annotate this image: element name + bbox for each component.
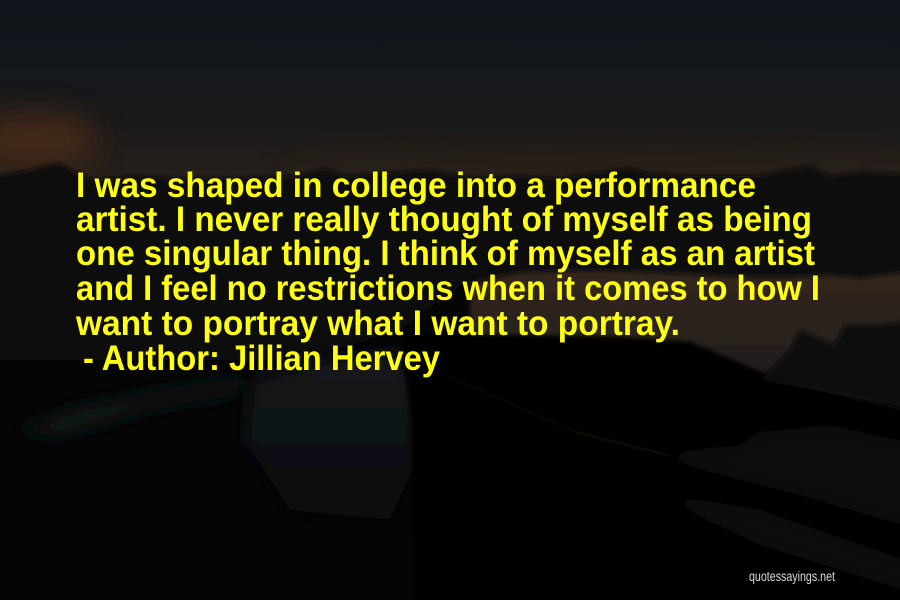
quote line 5: want to portray what I want to portray.: [75, 304, 680, 343]
quote line 1: I was shaped in college into a performance: [76, 166, 756, 205]
boat planks: [672, 425, 900, 530]
boat rim: [442, 373, 672, 456]
watermark: quotessayings.net: [749, 568, 835, 584]
sunset glow: [0, 110, 100, 170]
right water: [470, 268, 900, 413]
lit water patch, left foreground: [245, 352, 414, 520]
quote line 3: one singular thing. I think of myself as an artist: [76, 234, 815, 273]
quote line 2: artist. I never really thought of myself as being: [76, 200, 812, 239]
author attribution: - Author: Jillian Hervey: [83, 339, 440, 378]
sky: [0, 0, 900, 190]
boat hull interior: [402, 333, 900, 600]
boat: [402, 333, 900, 600]
reeds right: [760, 320, 900, 410]
quote line 4: and I feel no restrictions when it comes to how I: [76, 269, 820, 308]
tree line: [0, 163, 900, 360]
quote text: [75, 166, 820, 378]
